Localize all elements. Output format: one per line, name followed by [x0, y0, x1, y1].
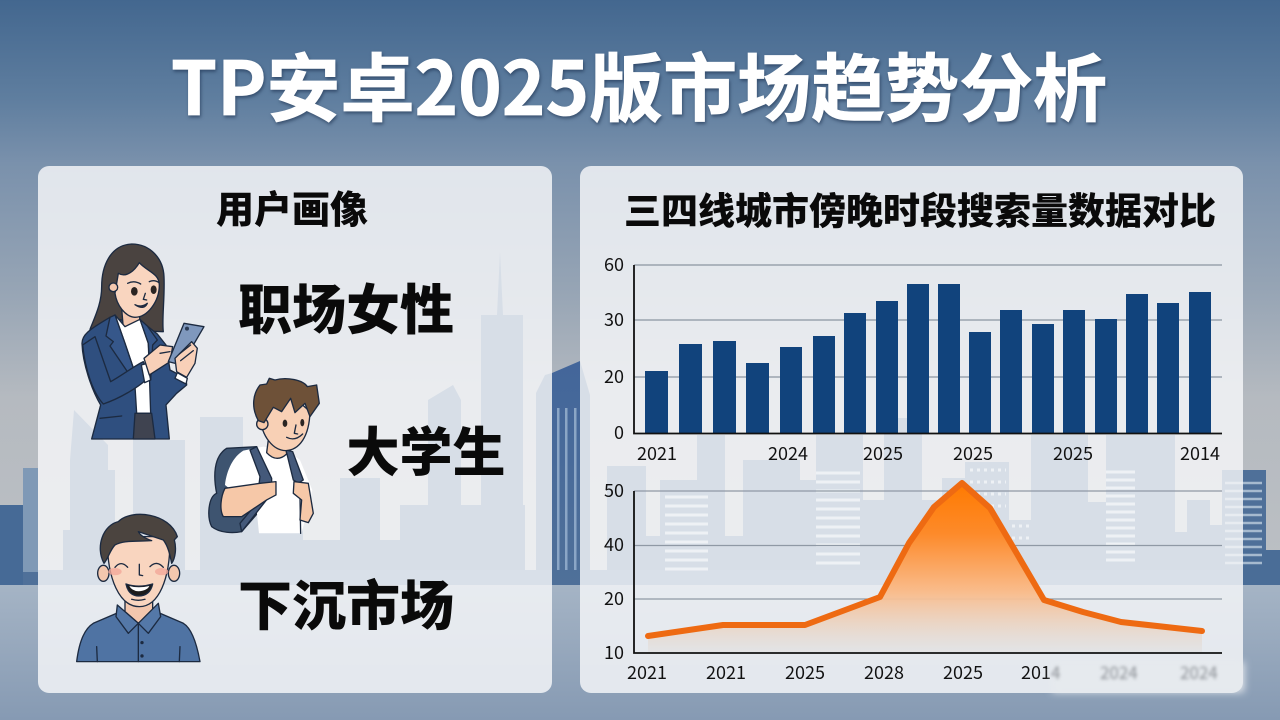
area line chart: 2021	[706, 659, 746, 685]
heading: evening search volume comparison: 三四线城市傍晚时段搜索量数据对比	[624, 181, 1216, 235]
bar chart: 30	[604, 306, 624, 332]
title: TP安卓2025版市场趋势分析	[171, 30, 1107, 137]
bar chart	[604, 251, 1222, 466]
bar chart: 2024	[768, 440, 808, 466]
bar chart: 2021	[637, 440, 677, 466]
bar chart: 20	[604, 363, 624, 389]
bar chart: 2025	[1053, 440, 1093, 466]
blurred corner patch	[1051, 659, 1244, 692]
icon: smiling man	[77, 514, 200, 662]
area line chart	[604, 477, 1222, 685]
label: lower-tier market: 下沉市场	[238, 562, 454, 641]
area line chart: 2021	[627, 659, 667, 685]
bar chart: 2025	[953, 440, 993, 466]
area line chart: 201	[1021, 659, 1051, 685]
bar chart: 60	[604, 251, 624, 277]
blurred corner patch: 2024	[1100, 659, 1138, 684]
area line chart: 2025	[785, 659, 825, 685]
label: professional women: 职场女性	[238, 266, 454, 345]
area line chart: 2025	[943, 659, 983, 685]
bar chart: 2014	[1180, 440, 1220, 466]
blurred corner patch: 4	[1051, 659, 1060, 684]
panel: evening search volume	[580, 166, 1243, 693]
area line chart: 20	[604, 585, 624, 611]
bar chart: 0	[614, 419, 624, 445]
icon: professional woman with phone	[82, 244, 204, 439]
area line chart: 10	[604, 639, 624, 665]
label: college students: 大学生	[346, 411, 506, 487]
blurred corner patch: 2024	[1180, 659, 1218, 684]
icon: college student with backpack	[209, 378, 319, 533]
area line chart: 2028	[864, 659, 904, 685]
bar chart: 2025	[863, 440, 903, 466]
panel: user persona	[38, 166, 552, 693]
area line chart: 40	[604, 531, 624, 557]
area line chart: 50	[604, 477, 624, 503]
heading: user persona: 用户画像	[216, 179, 368, 234]
